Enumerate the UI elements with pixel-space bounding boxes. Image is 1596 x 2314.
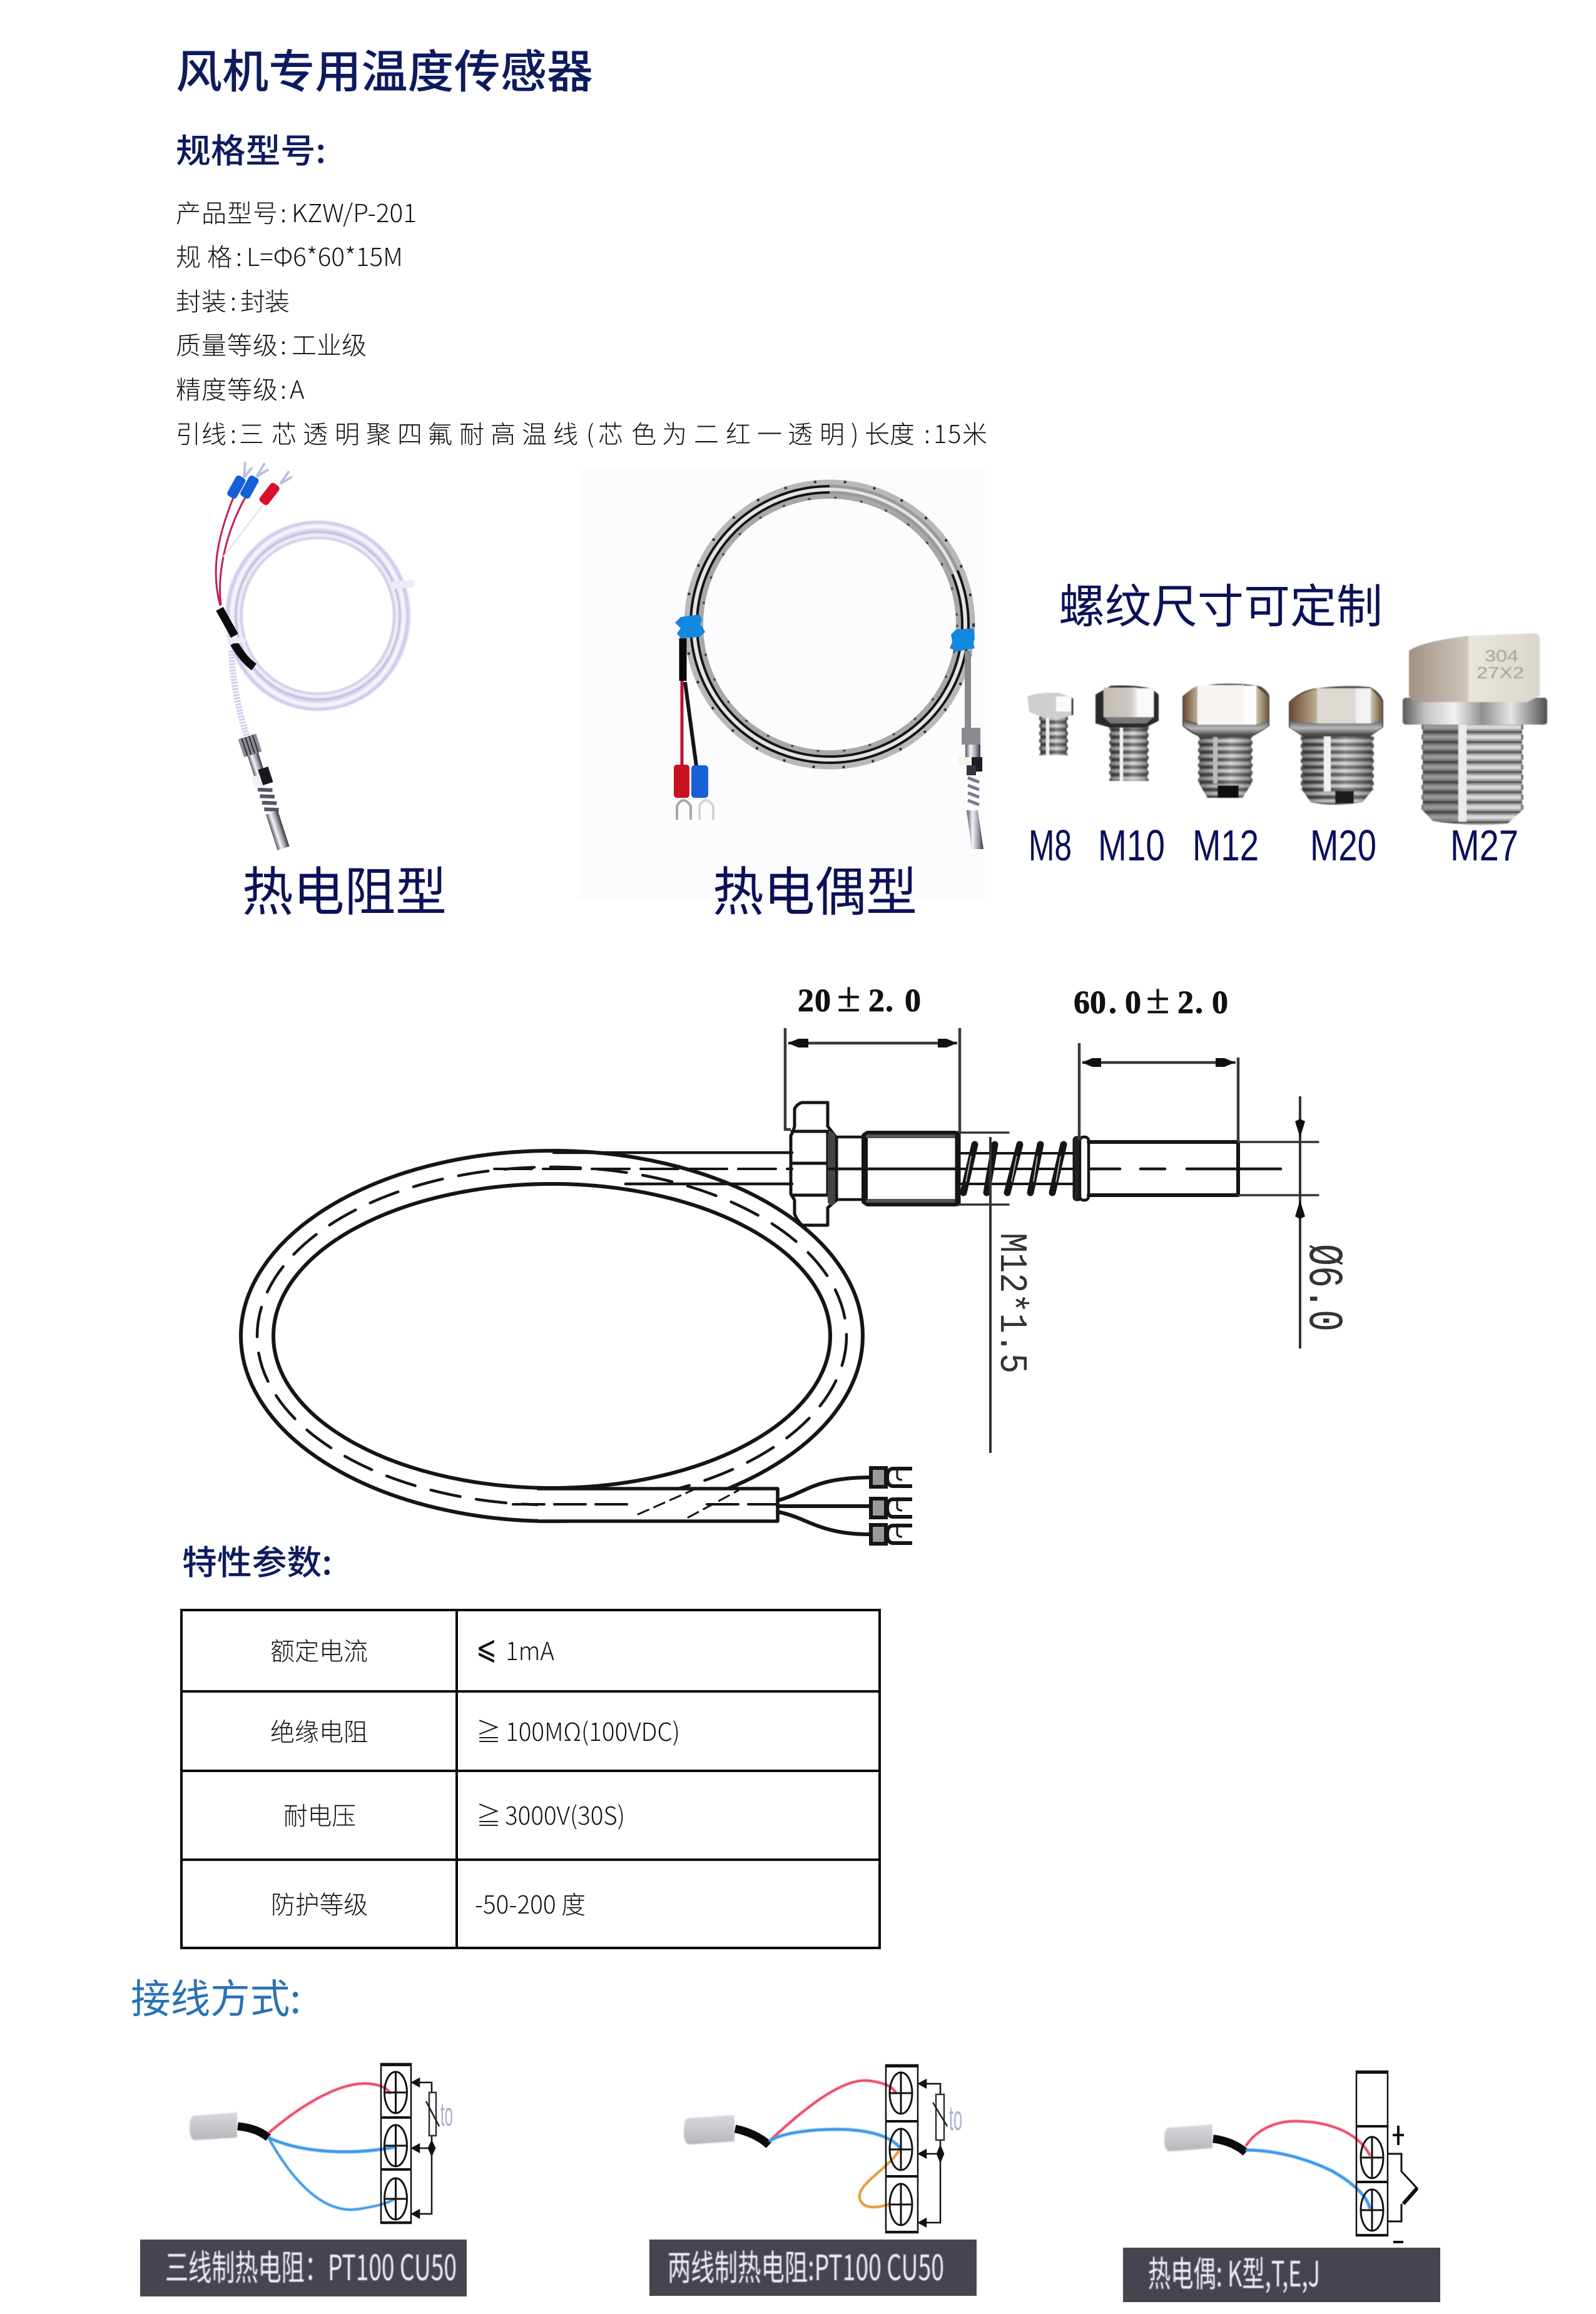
junction circuit: [1388, 2154, 1417, 2221]
dimension: 60: [1074, 975, 1238, 1142]
dimension: 60: 2: [1177, 985, 1194, 1021]
spec: model: [176, 193, 417, 230]
row: rated current: ⩽: [476, 1629, 497, 1667]
row: protection rating: [271, 1885, 586, 1921]
label: RTD type: 热电阻型: [242, 850, 447, 926]
resistor circuit: [919, 2080, 947, 2226]
photo: RTD sensor cable: [216, 462, 415, 851]
row: protection rating: -50-200 度: [475, 1885, 586, 1921]
technical drawing: [241, 973, 1350, 1544]
terminal block: [886, 2065, 918, 2233]
wiring diagram: two-wire RTD: [649, 2065, 977, 2296]
caption bar: 热电偶: K型,T,E,J: [1148, 2246, 1320, 2297]
spec: accuracy: 精度等级:A: [176, 370, 305, 406]
bolt M20: [1289, 686, 1383, 805]
row: withstand voltage: ≧: [476, 1796, 501, 1832]
sensor cable: [1213, 2139, 1246, 2153]
thread size labels: M8: [1029, 821, 1072, 870]
row: insulation resistance: 100MΩ(100VDC): [506, 1712, 680, 1748]
probe tube: [1074, 1137, 1318, 1200]
dimension: 20: 0: [815, 983, 831, 1019]
hex head: [791, 1103, 836, 1225]
thread size labels: M27: [1450, 821, 1518, 870]
braided coil: [686, 481, 973, 768]
coloured wires: [769, 2081, 901, 2207]
spec: size: [176, 237, 403, 273]
hex facets: [791, 1131, 831, 1201]
dimension: diameter 6.0: Ø6.0: [1295, 1244, 1350, 1332]
neck and threaded body: [829, 1133, 1009, 1205]
bolt M10: [1095, 686, 1159, 781]
bolt M12: [1182, 683, 1269, 798]
blue tie left: [675, 614, 705, 638]
row: insulation resistance: [270, 1712, 680, 1748]
resistor circuit: [412, 2079, 439, 2218]
cable tail to probe: [231, 651, 247, 737]
probe: [238, 733, 293, 851]
coloured wires: [1246, 2121, 1370, 2209]
polarity plus: [1393, 2126, 1404, 2145]
title: 风机专用温度传感器: [176, 35, 593, 101]
spec: size: L=Φ6*60*15M: [247, 237, 403, 273]
dimension: 60: 0: [1212, 985, 1228, 1021]
probe: [958, 728, 984, 849]
sensor cable: [735, 2129, 769, 2145]
dimension: 60: .: [1195, 985, 1203, 1021]
label: to: to: [440, 2096, 453, 2133]
dimension: 20: [785, 973, 960, 1133]
dimension: 20: 0: [905, 983, 921, 1019]
caption bar: [140, 2240, 467, 2296]
dimension: 60: .: [1109, 985, 1117, 1021]
terminal block: [1356, 2071, 1388, 2236]
row: rated current: 1mA: [506, 1631, 554, 1668]
terminals: [226, 462, 292, 506]
sensor cable: [238, 2126, 268, 2138]
dimension: diameter 6.0: [1295, 1096, 1350, 1348]
wiring diagram: three-wire RTD: [140, 2064, 467, 2296]
terminals: [674, 765, 713, 820]
thread size labels: [1029, 821, 1518, 870]
thread size labels: M20: [1310, 821, 1376, 870]
photo: thermocouple cable: [674, 481, 984, 849]
dimension: 60: 0: [1125, 985, 1141, 1021]
table grid: [181, 1610, 880, 1948]
polarity minus: [1393, 2241, 1403, 2243]
heading: characteristics: 特性参数:: [182, 1535, 332, 1584]
sensor capsule: [190, 2113, 237, 2140]
caption bar: 三线制热电阻：PT100 CU50: [165, 2240, 457, 2291]
thread size labels: M12: [1192, 821, 1259, 870]
coloured wires: [268, 2084, 395, 2210]
dimension: 20: 2: [798, 983, 814, 1019]
row: rated current: 额定电流: [270, 1631, 368, 1668]
specification list: [176, 193, 987, 451]
lead wires: [682, 638, 696, 766]
heading: custom thread sizes: 螺纹尺寸可定制: [1059, 569, 1383, 636]
sensor capsule: [1164, 2124, 1212, 2151]
heading: specifications: 规格型号:: [176, 123, 326, 173]
lead wires: [216, 497, 263, 606]
spec: package: 封装:封装: [176, 282, 290, 318]
dimension: 20: ±: [837, 973, 860, 1021]
bolt M8: [1027, 693, 1073, 755]
photo backdrop tint: [579, 469, 985, 901]
spec: model: KZW/P-201: [292, 193, 417, 230]
terminal block: [381, 2064, 411, 2223]
cable end sleeve: [513, 1489, 778, 1521]
spec: model: 产品型号:: [176, 193, 287, 230]
dimension: 60: 0: [1090, 985, 1106, 1021]
dimension: M12*1.5: M12*1.5: [989, 1233, 1034, 1374]
row: rated current: [270, 1629, 554, 1668]
blue tie right: [950, 628, 975, 651]
dimension: 20: .: [885, 983, 893, 1019]
spec: size: 规格:: [176, 237, 242, 273]
cable loop: [241, 1151, 863, 1521]
thread size samples: [1027, 633, 1547, 825]
row: insulation resistance: ≧: [476, 1712, 501, 1748]
probe tail: [965, 651, 971, 728]
lead wires and terminals: [778, 1468, 912, 1544]
dimension: 60: ±: [1146, 975, 1169, 1022]
row: withstand voltage: 3000V(30S): [505, 1796, 625, 1832]
cable coil: [228, 522, 408, 710]
row: insulation resistance: 绝缘电阻: [270, 1712, 368, 1748]
bolt M27: 27X2: [1477, 663, 1524, 682]
thread size labels: M10: [1098, 821, 1165, 870]
label: to: to: [949, 2099, 962, 2138]
wiring diagram: thermocouple: [1123, 2071, 1440, 2302]
bolt M27: [1403, 633, 1547, 825]
dimension: 60: 6: [1074, 985, 1090, 1021]
spec: quality: 质量等级:工业级: [176, 325, 367, 362]
caption bar: 两线制热电阻:PT100 CU50: [668, 2240, 944, 2291]
parameters table: [181, 1610, 880, 1948]
heat shrink: [220, 609, 254, 667]
bolt M27: 304: [1485, 646, 1518, 665]
dimension: 20: 2: [868, 983, 885, 1019]
spec: lead wire: 引线:三芯透明聚四氟耐高温线(芯色为二红一透明)长度:15米: [176, 414, 987, 451]
heading: wiring methods: 接线方式:: [131, 1967, 301, 2025]
sensor capsule: [684, 2115, 734, 2144]
caption bar: [649, 2240, 977, 2296]
row: withstand voltage: [283, 1796, 625, 1832]
row: protection rating: 防护等级: [271, 1885, 368, 1921]
spring: [960, 1144, 1074, 1193]
label: thermocouple type: 热电偶型: [713, 850, 917, 926]
row: withstand voltage: 耐电压: [283, 1796, 356, 1832]
cable ties: [227, 579, 415, 643]
